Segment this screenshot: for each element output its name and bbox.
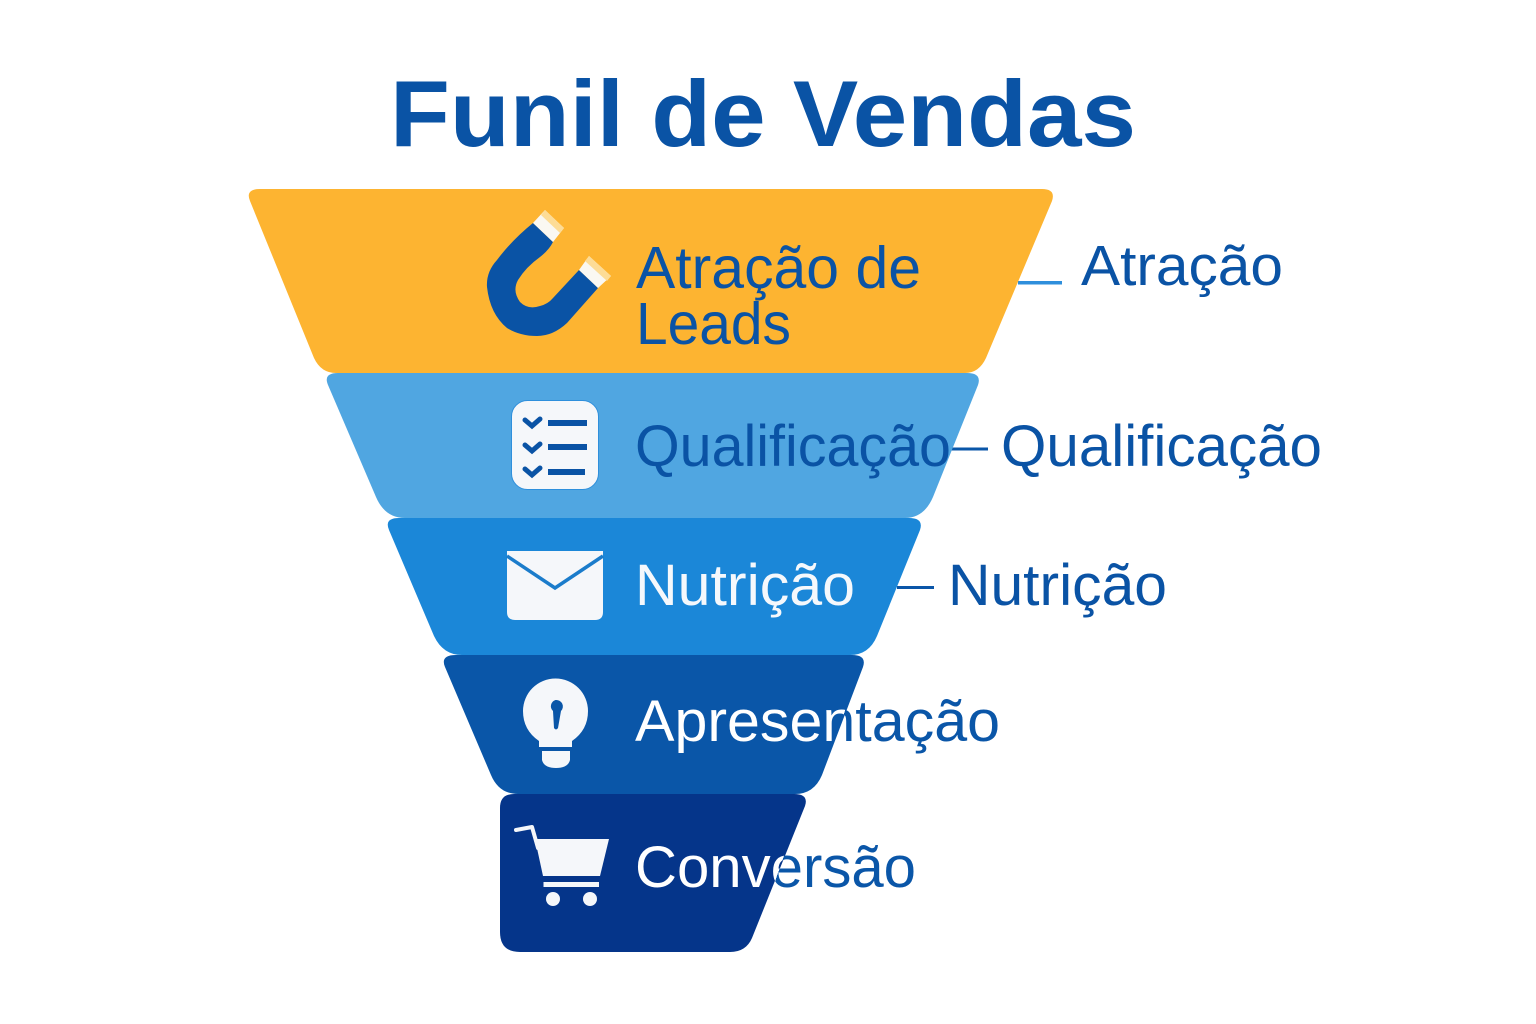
title: Funil de Vendas [390, 61, 1136, 166]
band: medium blue [388, 518, 921, 655]
connector: Nutrição [897, 586, 934, 589]
funnel layer: Apresentação [444, 655, 1000, 794]
label: Apresentação (crossing funnel edge): Apresentação [635, 689, 1000, 754]
label: Atração de Leads: Leads [636, 291, 791, 357]
band: dark blue [444, 655, 864, 794]
icon: magnet [487, 210, 611, 336]
label: Atração de Leads [636, 235, 921, 357]
funnel layer: Qualificação [327, 373, 979, 518]
band: orange [249, 189, 1053, 373]
icon: envelope [507, 551, 603, 620]
connector: Qualificação [950, 448, 988, 450]
label: Qualificação (inside): Qualificação [635, 414, 951, 479]
label: Atração de Leads: Atração de [636, 235, 921, 301]
connector: Atração [1018, 281, 1062, 284]
band: navy [500, 794, 806, 952]
label: Nutrição (inside): Nutrição [635, 553, 855, 618]
side label: Atração: Atração [1081, 234, 1283, 298]
icon: shopping cart [516, 827, 609, 906]
label: Conversão (crossing funnel edge): Conversão [635, 835, 916, 900]
funnel layer: Nutrição [388, 518, 921, 655]
icon: light bulb [523, 678, 588, 768]
side label: Nutrição: Nutrição [948, 553, 1167, 618]
icon: checklist [512, 400, 598, 490]
side label: Qualificação: Qualificação [1001, 414, 1322, 479]
funnel layer: Conversão [500, 794, 916, 952]
funnel layer: Atração de Leads [249, 189, 1053, 373]
band: light blue [327, 373, 979, 518]
